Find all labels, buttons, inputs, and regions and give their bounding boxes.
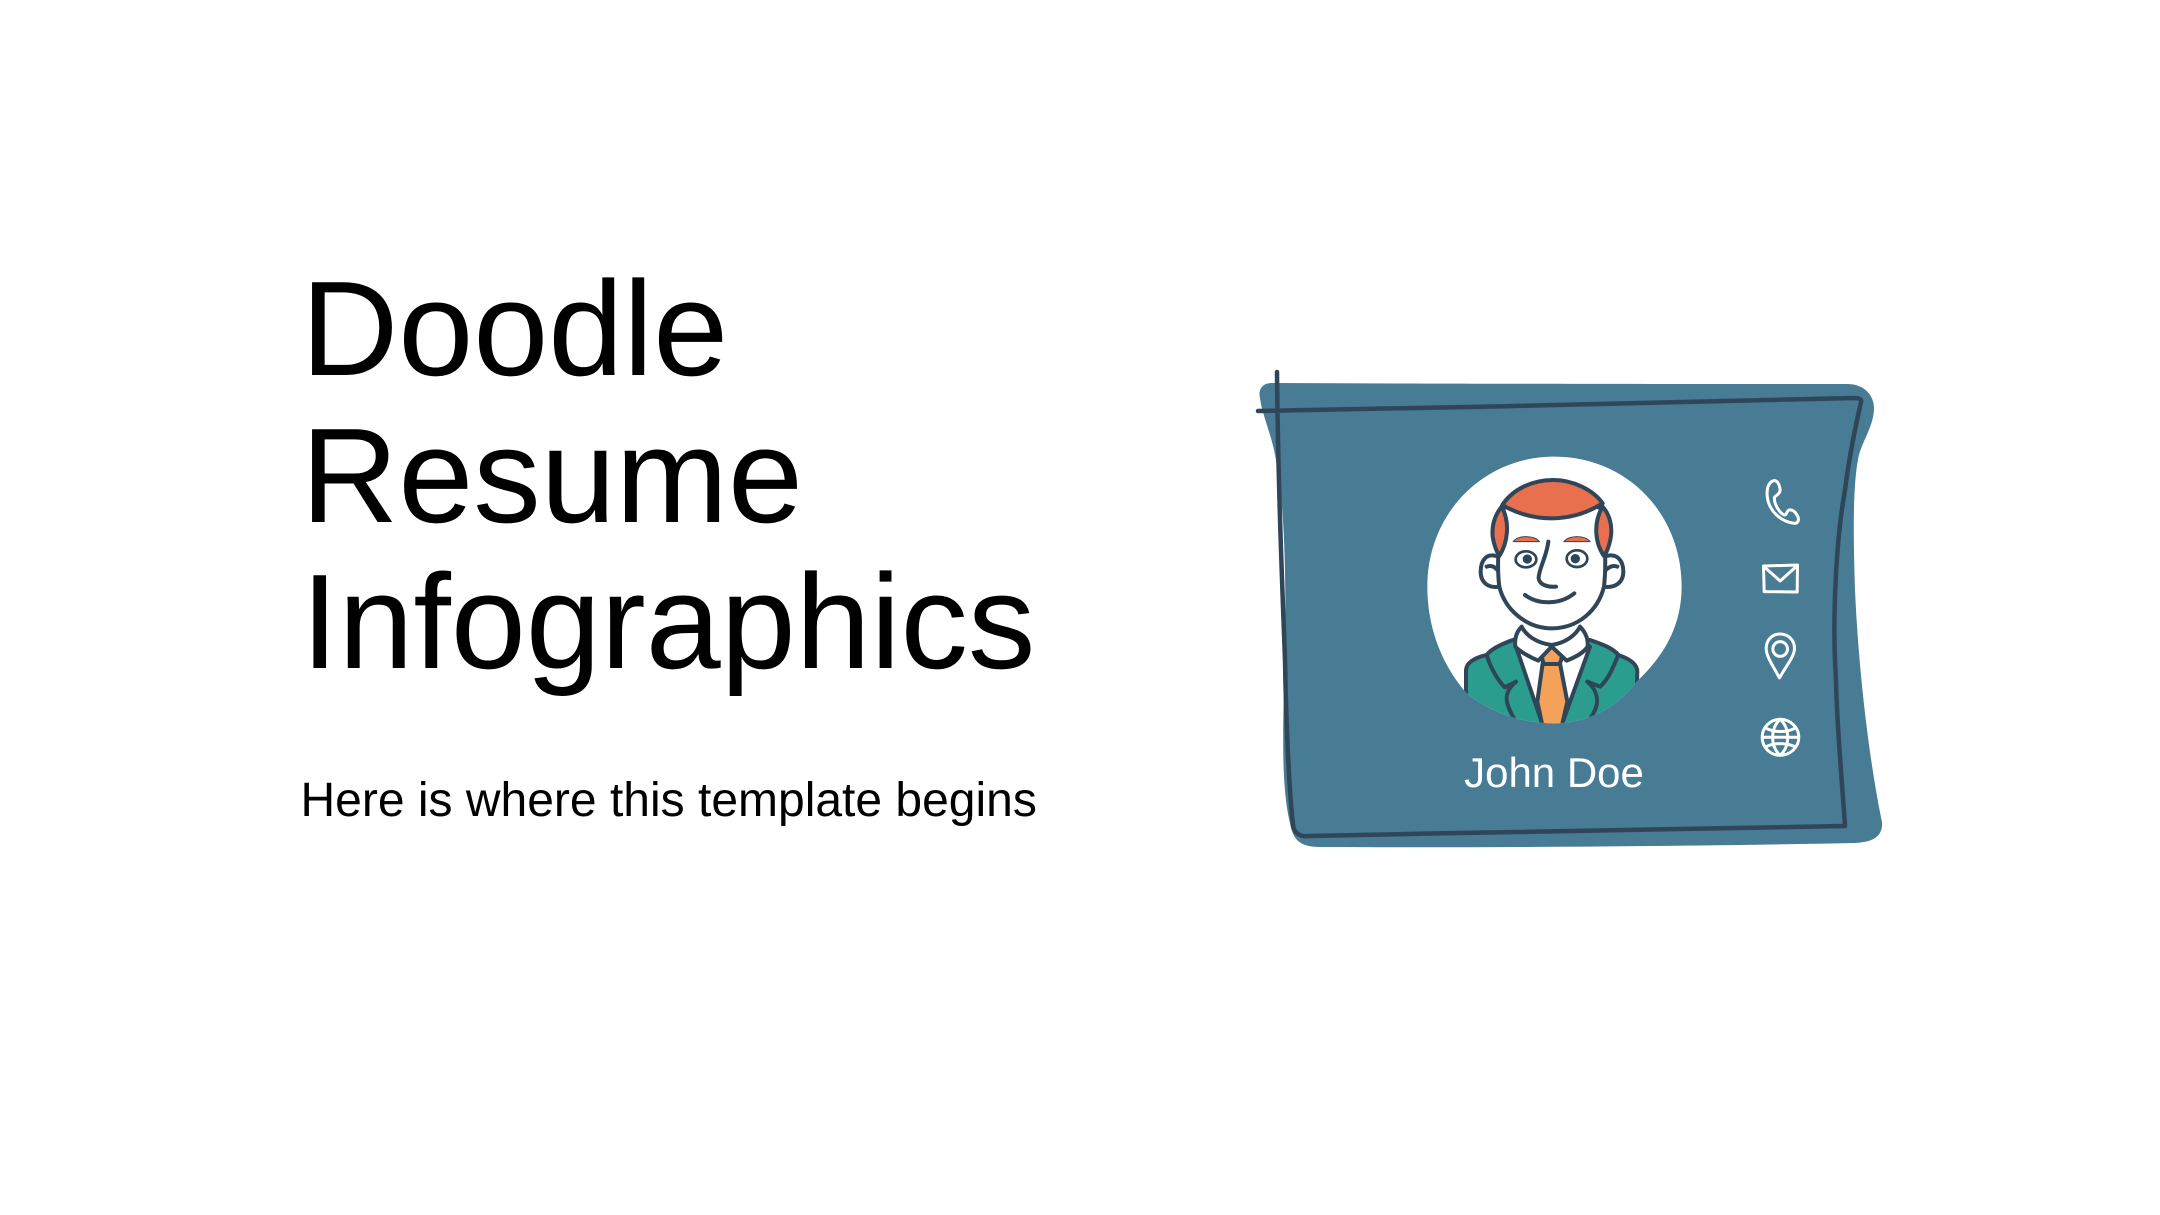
icon: envelope (1763, 565, 1797, 592)
title: Doodle (301, 253, 728, 404)
portrait background (1427, 457, 1682, 723)
icon: map pin (1766, 634, 1794, 678)
hair left side (1492, 507, 1507, 556)
head (1498, 493, 1605, 628)
icon: phone (1767, 481, 1798, 523)
hair right side (1596, 507, 1611, 556)
ears (1481, 555, 1623, 587)
portrait (1427, 457, 1682, 730)
left eye (1516, 551, 1536, 567)
right eyebrow (1564, 537, 1590, 542)
left eyebrow (1513, 537, 1539, 542)
card sketch outline (1258, 372, 1861, 836)
title: Infographics (301, 546, 1035, 697)
subtitle: Here is where this template begins (300, 774, 1037, 827)
icon: globe (1762, 719, 1799, 755)
contact icons (1762, 481, 1799, 755)
name: John Doe (1464, 749, 1644, 796)
hair (1502, 480, 1603, 518)
card background (1260, 383, 1882, 847)
jacket and shirt (1466, 627, 1637, 730)
title: Resume (301, 400, 803, 550)
title (301, 253, 1035, 697)
resume card illustration (1256, 370, 1882, 848)
right eye (1567, 550, 1587, 567)
nose and mouth (1525, 542, 1574, 602)
